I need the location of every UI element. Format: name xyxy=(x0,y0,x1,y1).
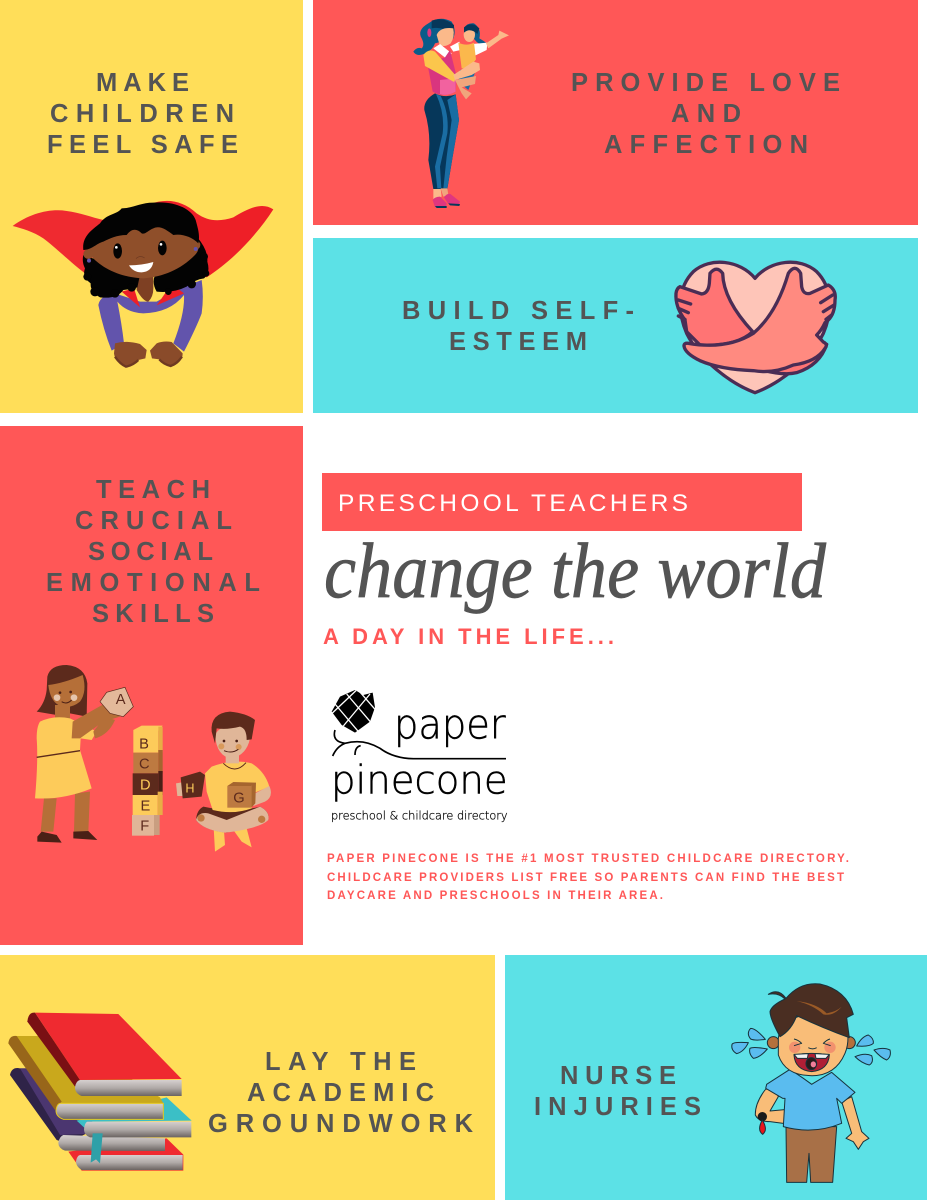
icon: crying boy with bleeding finger xyxy=(732,984,890,1182)
description paragraph: PAPER PINECONE IS THE #1 MOST TRUSTED CHILDCARE DIRECTORY. xyxy=(327,853,849,865)
logo: paper pinecone xyxy=(331,690,508,822)
icon: stack of books xyxy=(8,1013,192,1171)
heading: MAKE xyxy=(96,69,189,97)
icon: children playing with alphabet blocks: A xyxy=(116,692,126,708)
heading: FEEL SAFE xyxy=(47,131,238,159)
panel background xyxy=(313,0,918,225)
panel: build self-esteem xyxy=(313,238,918,413)
icon: children playing with alphabet blocks: G xyxy=(233,791,245,807)
banner: preschool teachers: PRESCHOOL TEACHERS xyxy=(338,490,688,517)
icon: pinecone xyxy=(332,690,506,759)
heading: LAY THE xyxy=(265,1048,416,1076)
heading xyxy=(571,69,840,159)
panel background xyxy=(505,955,927,1200)
wordmark: pinecone: pinecone xyxy=(331,757,508,803)
tagline: preschool & childcare directory xyxy=(331,808,508,822)
heading: SOCIAL xyxy=(88,538,213,566)
title block xyxy=(322,473,827,649)
icon: caped superhero girl xyxy=(13,201,273,367)
heading xyxy=(402,297,634,356)
banner: preschool teachers xyxy=(322,473,802,531)
panel background xyxy=(0,955,495,1200)
icon: children playing with alphabet blocks: E xyxy=(140,799,150,815)
heading xyxy=(47,69,238,159)
heading: AND xyxy=(671,100,741,128)
heading: SKILLS xyxy=(92,600,214,628)
heading: TEACH xyxy=(96,476,210,504)
heading xyxy=(534,1062,701,1121)
heading: ESTEEM xyxy=(449,328,587,356)
panel: make children feel safe xyxy=(0,0,303,413)
panel: lay the academic groundwork xyxy=(0,955,495,1200)
heading: AFFECTION xyxy=(604,131,808,159)
heading: NURSE xyxy=(560,1062,676,1090)
panel: nurse injuries xyxy=(505,955,927,1200)
heading: ACADEMIC xyxy=(247,1079,434,1107)
heading: BUILD SELF- xyxy=(402,297,634,325)
wordmark: paper: paper xyxy=(394,700,506,748)
icon: mother holding child xyxy=(413,19,509,208)
description paragraph: CHILDCARE PROVIDERS LIST FREE SO PARENTS CAN FIND THE BEST xyxy=(327,872,844,884)
description paragraph xyxy=(327,853,849,902)
subheading: a day in the life: A DAY IN THE LIFE... xyxy=(323,624,614,649)
icon: children playing with alphabet blocks xyxy=(35,665,271,852)
heading xyxy=(46,476,260,628)
heading: GROUNDWORK xyxy=(208,1110,474,1138)
heading: PROVIDE LOVE xyxy=(571,69,840,97)
panel: provide love and affection xyxy=(313,0,918,225)
heading xyxy=(208,1048,474,1138)
description paragraph: DAYCARE AND PRESCHOOLS IN THEIR AREA. xyxy=(327,890,663,902)
icon: children playing with alphabet blocks: C xyxy=(139,757,150,773)
panel: teach crucial social emotional skills xyxy=(0,426,303,945)
heading: CHILDREN xyxy=(50,100,234,128)
panel background xyxy=(0,426,303,945)
icon: children playing with alphabet blocks: B xyxy=(139,737,149,753)
panel background xyxy=(313,238,918,413)
panel background xyxy=(0,0,303,413)
heading: INJURIES xyxy=(534,1093,701,1121)
heading: CRUCIAL xyxy=(75,507,232,535)
heading: EMOTIONAL xyxy=(46,569,260,597)
headline: change the world: change the world xyxy=(324,527,827,614)
icon: children playing with alphabet blocks: D xyxy=(140,777,151,793)
icon: children playing with alphabet blocks: F xyxy=(140,819,149,835)
icon: children playing with alphabet blocks: H xyxy=(185,782,195,796)
icon: heart hugging itself xyxy=(676,262,835,393)
